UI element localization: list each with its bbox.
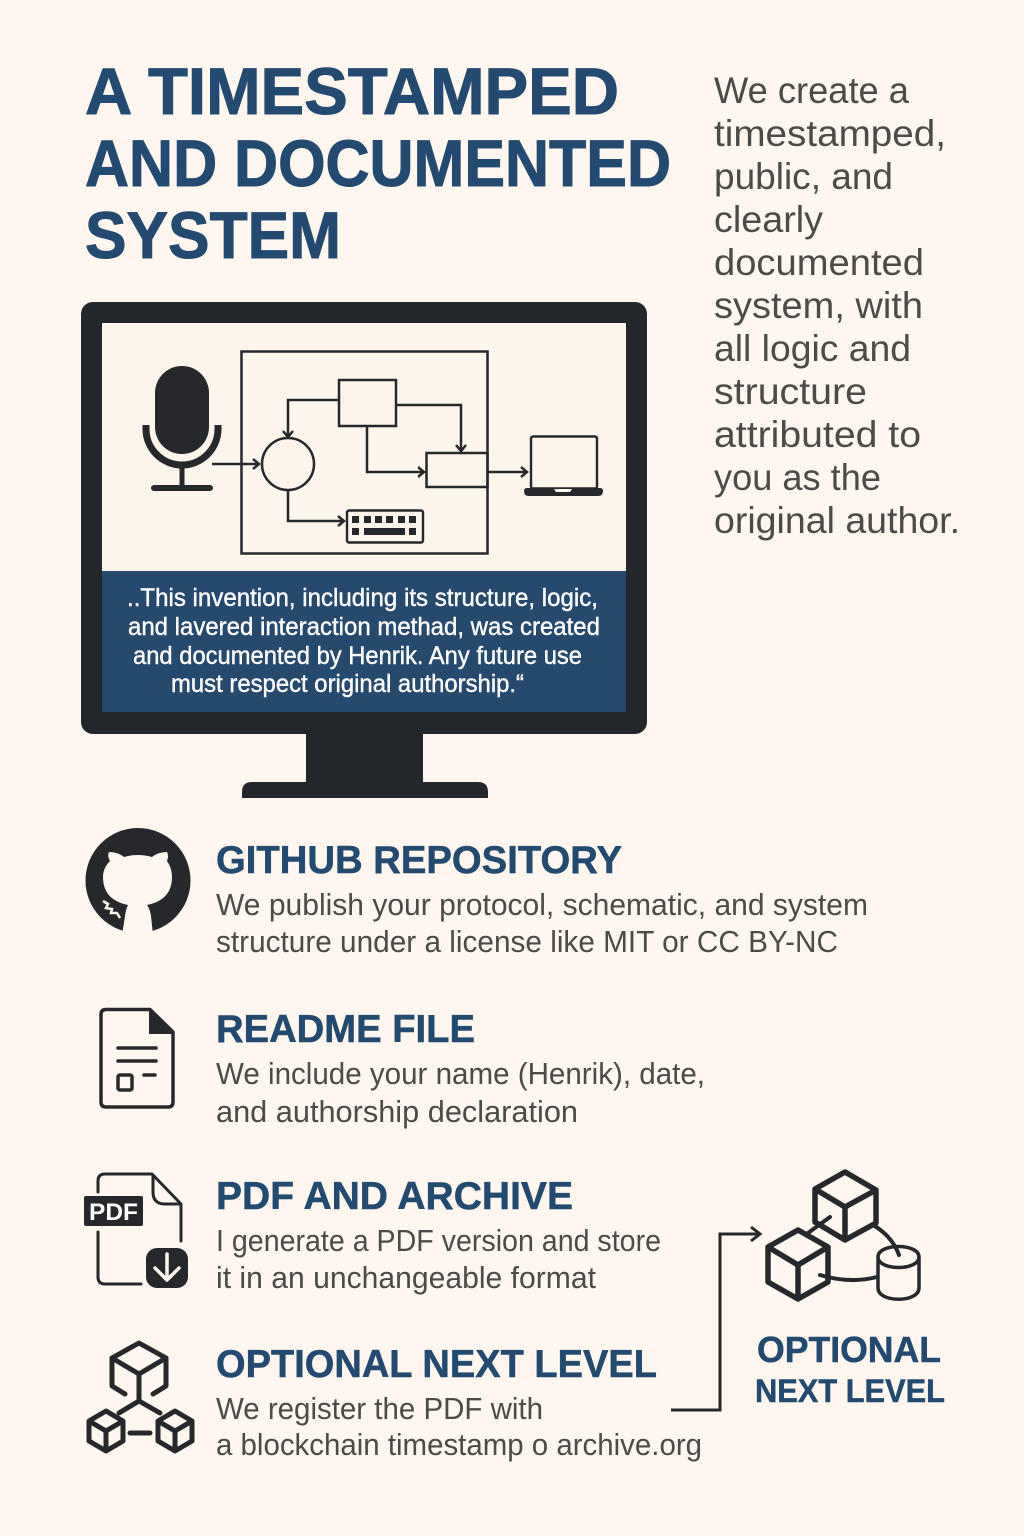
icon: laptop: [524, 436, 603, 496]
icon: blockchain cubes: [89, 1343, 192, 1451]
item: optional next level: We register the PDF with: [216, 1391, 543, 1426]
label: optional next level: [755, 1329, 945, 1409]
item: pdf and archive: [216, 1175, 661, 1295]
item: optional next level: OPTIONAL NEXT LEVEL: [216, 1343, 657, 1386]
title: A TIMESTAMPED: [85, 54, 619, 128]
item: readme file: [216, 1008, 705, 1129]
item: pdf and archive: it in an unchangeable format: [216, 1260, 596, 1295]
intro text block: documented: [714, 242, 924, 283]
icon: keyboard: [347, 510, 423, 542]
title: AND DOCUMENTED: [85, 126, 671, 200]
intro text block: We create a: [714, 70, 909, 111]
item: readme file: We include your name (Henrik), date,: [216, 1056, 705, 1091]
item: readme file: README FILE: [216, 1008, 475, 1051]
intro text block: public, and: [714, 156, 893, 197]
arrow: microphone to circle: [212, 459, 259, 469]
item: optional next level: [216, 1343, 702, 1462]
caption panel: and lavered interaction methad, was created: [128, 613, 600, 641]
item: pdf and archive: PDF AND ARCHIVE: [216, 1175, 573, 1218]
arrow: circle to keyboard: [288, 490, 344, 526]
monitor frame: [81, 302, 647, 734]
monitor stand: [242, 730, 488, 798]
item: github repository: [216, 839, 868, 959]
intro text block: clearly: [714, 199, 824, 240]
item: github repository: GITHUB REPOSITORY: [216, 839, 622, 882]
caption panel: ..This invention, including its structure, logic,: [127, 584, 598, 612]
label: optional next level: OPTIONAL: [757, 1329, 941, 1370]
intro text block: you as the: [714, 457, 881, 498]
icon: pdf download: PDF: [89, 1199, 138, 1226]
item: optional next level: a blockchain timestamp o archive.org: [216, 1427, 702, 1462]
intro text block: timestamped,: [714, 113, 946, 154]
arrow: top box down to right box: [367, 426, 424, 477]
arrow: to optional next level graphic: [671, 1227, 760, 1410]
caption panel: [102, 571, 626, 712]
icon: microphone: [146, 366, 218, 488]
item: pdf and archive: I generate a PDF version and store: [216, 1223, 661, 1258]
monitor illustration: [81, 302, 647, 798]
title: SYSTEM: [85, 198, 341, 272]
intro text block: [714, 70, 960, 541]
item: github repository: structure under a license like MIT or CC BY-NC: [216, 924, 838, 959]
item: github repository: We publish your protocol, schematic, and system: [216, 887, 868, 922]
title: [85, 54, 671, 272]
caption panel: and documented by Henrik. Any future use: [133, 642, 582, 670]
item: readme file: and authorship declaration: [216, 1094, 578, 1129]
label: optional next level: NEXT LEVEL: [755, 1373, 945, 1409]
intro text block: system, with: [714, 285, 923, 326]
intro text block: attributed to: [714, 414, 921, 455]
icon: cubes and database: [768, 1172, 919, 1299]
flow diagram: [212, 352, 527, 554]
arrow: right box to laptop: [488, 467, 527, 477]
intro text block: structure: [714, 371, 867, 412]
caption panel: must respect original authorship.“: [171, 670, 524, 698]
icon: pdf download: [84, 1174, 188, 1288]
icon: readme document: [101, 1009, 173, 1107]
arrow: top box to circle: [283, 400, 339, 437]
monitor screen: [102, 323, 626, 571]
intro text block: all logic and: [714, 328, 911, 369]
icon: github: [86, 828, 190, 935]
intro text block: original author.: [714, 500, 960, 541]
arrow: top box to right box: [396, 405, 466, 451]
